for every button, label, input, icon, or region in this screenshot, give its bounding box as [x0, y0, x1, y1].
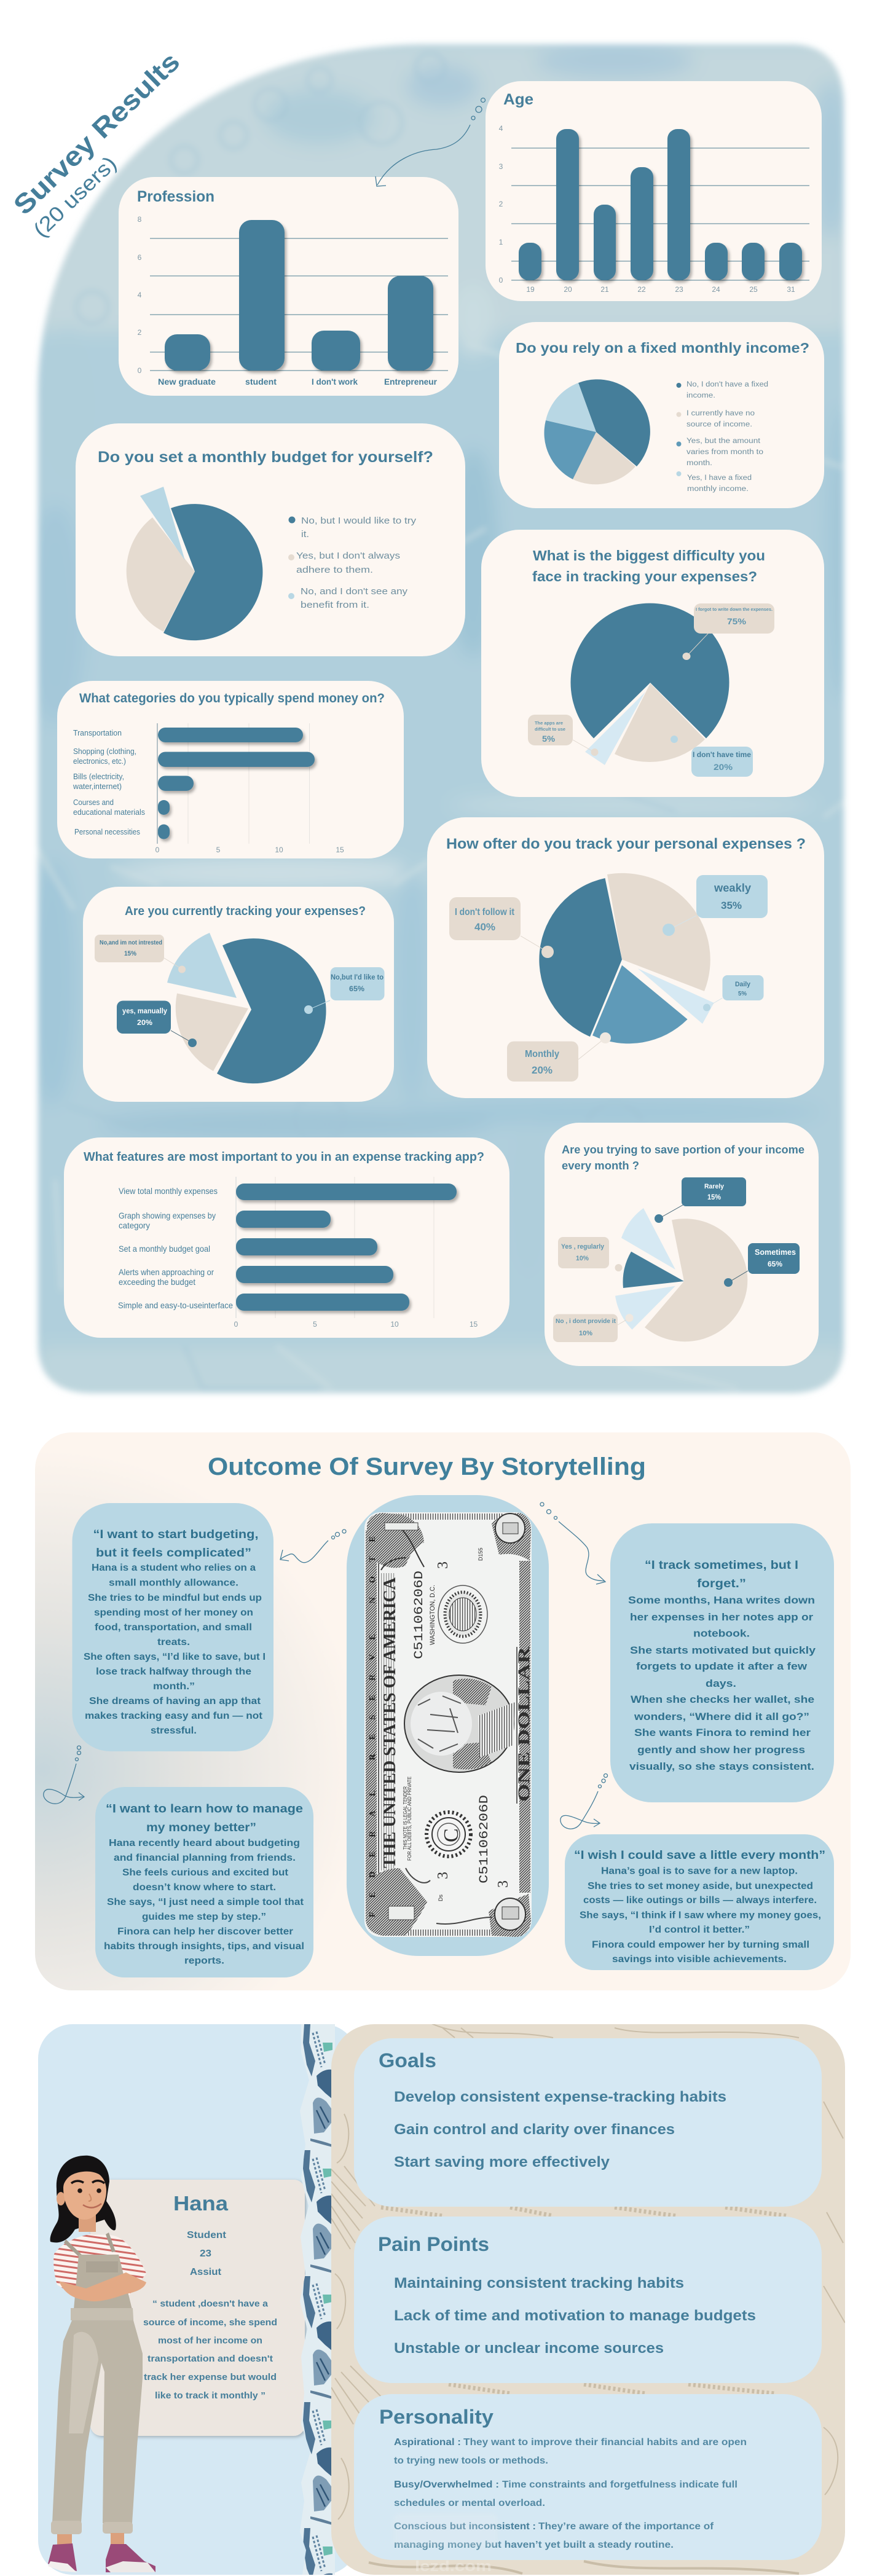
chart: age bars: 25 [749, 285, 758, 294]
callout: rarely [655, 1177, 746, 1223]
chart: profession bars: 2 [138, 328, 142, 337]
quote: track sometimes: days. [706, 1678, 736, 1689]
chart: spending categories bars: Courses and [73, 798, 114, 807]
chart: spending categories bars: Transportation [73, 728, 122, 737]
quote: track sometimes: When she checks her wallet, she [631, 1694, 814, 1705]
quote: save every month: costs — like outings or bills — always interfere. [583, 1895, 817, 1906]
heading: fixed income: Do you rely on a fixed monthly income? [516, 340, 809, 356]
illustration: one dollar banknote [364, 1512, 533, 1937]
quote: start budgeting [73, 1503, 273, 1751]
chart: important features bars: Simple and easy-to-useinterface [118, 1300, 233, 1310]
quote: start budgeting: She often says, “I’d like to save, but I [84, 1652, 266, 1662]
heading: important features: What features are most important to you in an expense tracking app? [84, 1150, 484, 1164]
chart: age bars: 23 [675, 285, 683, 294]
quote: track sometimes: forgets to update it after a few [636, 1660, 808, 1672]
panel: monthly budget [76, 423, 465, 656]
chart: profession bars: I don't work [312, 377, 358, 387]
arrow: banknote to first quote [280, 1530, 346, 1563]
chart: profession bars: 4 [138, 291, 142, 299]
quote: track sometimes: wonders, “Where did it all go?” [634, 1711, 809, 1722]
pie chart: monthly budget [127, 487, 262, 640]
quote: track sometimes: Some months, Hana writes down [628, 1594, 815, 1606]
card: hana profile: Hana [173, 2192, 229, 2215]
chart: age bars: 21 [600, 285, 609, 294]
banknote inscriptions: ONE DOLLAR [515, 1647, 533, 1802]
callout: monthly [507, 1032, 611, 1082]
banknote inscriptions: FOR ALL DEBTS, PUBLIC AND PRIVATE [407, 1777, 412, 1861]
watermark: lezd.com [415, 2558, 492, 2575]
panel: biggest difficulty [481, 530, 824, 797]
quote: track sometimes: She wants Finora to remind her [634, 1727, 811, 1738]
quote: start budgeting: but it feels complicated” [96, 1547, 251, 1560]
callout: forgot to write: I forgot to write down the expenses. [696, 607, 773, 612]
chart: age bars: 0 [499, 276, 503, 285]
quote: track sometimes: her expenses in her notes app or [630, 1611, 813, 1623]
chart: spending categories bars [73, 723, 344, 854]
card: hana profile [90, 2180, 305, 2436]
chart: age bars: 3 [499, 162, 503, 171]
legend: monthly budget: it. [301, 530, 309, 540]
card: goals [354, 2038, 822, 2207]
callout: forgot to write [682, 603, 774, 660]
quote: start budgeting: She tries to be mindful but ends up [88, 1593, 262, 1603]
card: hana profile: Assiut [190, 2267, 221, 2277]
quote: track sometimes: forget.” [697, 1577, 746, 1590]
banknote inscriptions: FEDERAL RESERVE NOTE [368, 1536, 377, 1917]
pie chart: fixed income [544, 379, 650, 484]
quote: save every month: I’d control it better.” [649, 1925, 750, 1935]
quote: track sometimes: “I track sometimes, but I [645, 1559, 798, 1572]
callout: apps difficult: difficult to use [535, 726, 565, 732]
heading: tracking expenses: Are you currently tracking your expenses? [125, 905, 366, 918]
quote: save every month: Hana’s goal is to save for a new laptop. [601, 1866, 798, 1877]
card: pain points: Maintaining consistent tracking habits [394, 2275, 684, 2291]
panel: tracking frequency [427, 817, 824, 1098]
quote: start budgeting: “I want to start budgeting, [93, 1528, 258, 1541]
subtitle: twenty users: (20 users) [29, 152, 121, 242]
card: personality: Aspirational : [394, 2437, 461, 2448]
panel: banknote frame [347, 1495, 549, 1956]
callout: no time: I don't have time [693, 750, 751, 759]
callout: rarely: Rarely [704, 1183, 725, 1190]
chart: profession bars: Entrepreneur [384, 377, 438, 387]
card: pain points: Pain Points [378, 2233, 489, 2255]
legend: monthly budget: benefit from it. [301, 600, 369, 610]
pie chart: tracking expenses [167, 933, 326, 1083]
card: hana profile: most of her income on [158, 2335, 262, 2346]
quote: learn to manage money: Hana recently heard about budgeting [109, 1838, 300, 1848]
callout: weekly [663, 875, 768, 936]
banknote inscriptions: C [440, 1828, 463, 1842]
quote: start budgeting: food, transportation, and small [95, 1622, 252, 1633]
panel: persona left [38, 2024, 358, 2575]
quote: track sometimes [610, 1523, 834, 1802]
heading: monthly budget: Do you set a monthly budget for yourself? [98, 449, 433, 466]
arrow: to lower right quote [560, 1773, 607, 1829]
chart: age bars: 1 [499, 238, 503, 246]
callout: sometimes: 65% [768, 1260, 782, 1268]
quote: learn to manage money: “I want to learn how to manage [106, 1803, 303, 1815]
panel: age [486, 81, 822, 301]
legend: fixed income: month. [686, 460, 712, 467]
chart: important features bars [118, 1177, 478, 1329]
callout: apps difficult: The apps are [535, 720, 563, 726]
chart: age bars: 19 [526, 285, 535, 294]
callout: do not provide [553, 1314, 633, 1342]
banknote inscriptions: Ds [438, 1895, 444, 1901]
chart: important features bars: Set a monthly budget goal [119, 1244, 210, 1254]
panel: tracking expenses [83, 887, 394, 1102]
chart: profession bars: 8 [138, 215, 142, 224]
callout: would like to: 65% [349, 984, 364, 993]
chart: important features bars: 0 [234, 1320, 238, 1329]
quote: save every month: “I wish I could save a little every month” [574, 1849, 825, 1862]
heading: spending categories: What categories do you typically spend money on? [79, 691, 385, 705]
legend: fixed income: income. [686, 392, 715, 399]
callout: rarely: 15% [707, 1194, 721, 1201]
chart: important features bars: Alerts when approaching or [119, 1267, 214, 1277]
quote: track sometimes: She starts motivated but quickly [630, 1644, 816, 1656]
chart: profession bars: 0 [138, 366, 142, 375]
callout: daily [703, 975, 763, 1011]
card: pain points [354, 2217, 822, 2383]
legend: monthly budget [288, 516, 417, 610]
chart: age bars: 22 [637, 285, 646, 294]
quote: learn to manage money: my money better” [146, 1821, 256, 1834]
card: hana profile: like to track it monthly ” [155, 2390, 266, 2401]
quote: learn to manage money: Finora can help her discover better [117, 1926, 293, 1937]
banknote inscriptions: THIS NOTE IS LEGAL TENDER [403, 1786, 408, 1850]
decoration: crumpled dollar strip [300, 2024, 335, 2575]
legend: fixed income [676, 381, 768, 493]
banknote inscriptions [368, 1536, 533, 1917]
quote: track sometimes: visually, so she stays consistent. [629, 1761, 814, 1772]
card: personality: Busy/Overwhelmed : [394, 2480, 499, 2490]
quote: start budgeting: treats. [157, 1637, 190, 1647]
chart: age bars: 4 [499, 124, 503, 133]
card: pain points: Lack of time and motivation to manage budgets [394, 2307, 756, 2324]
quote: start budgeting: She dreams of having an app that [89, 1696, 261, 1706]
heading: profession: Profession [137, 188, 214, 205]
chart: spending categories bars: educational materials [73, 807, 145, 817]
panel: spending categories [57, 681, 404, 858]
heading: saving portion: every month ? [562, 1160, 639, 1172]
card: personality: Time constraints and forgetfulness indicate full [502, 2480, 738, 2490]
card: pain points: Unstable or unclear income sources [394, 2340, 664, 2357]
callout: would like to [304, 967, 385, 1014]
quote: learn to manage money: and financial planning from friends. [114, 1853, 296, 1863]
callout: do not follow: I don't follow it [455, 907, 515, 917]
quote: start budgeting: small monthly allowance. [109, 1578, 238, 1588]
chart: spending categories bars: 15 [336, 846, 344, 854]
callout: not interested: 15% [124, 950, 136, 957]
heading: saving portion: Are you trying to save portion of your income [562, 1144, 804, 1156]
heading: biggest difficulty: face in tracking your expenses? [532, 568, 757, 584]
callout: would like to: No,but I'd like to [331, 974, 384, 981]
chart: spending categories bars: 0 [155, 846, 160, 854]
legend: fixed income: No, I don't have a fixed [686, 381, 768, 388]
quote: learn to manage money: She feels curious and excited but [122, 1867, 288, 1878]
panel: storytelling [35, 1432, 851, 1990]
card: hana profile: 23 [200, 2248, 211, 2259]
callout: daily: 5% [738, 991, 747, 997]
heading: age: Age [503, 91, 533, 108]
quote: start budgeting: lose track halfway through the [96, 1667, 251, 1677]
banknote inscriptions: D155 [478, 1547, 484, 1561]
card: goals: Develop consistent expense-tracking habits [394, 2089, 726, 2105]
panel: saving portion [545, 1123, 819, 1366]
quote: learn to manage money: She says, “I just need a simple tool that [107, 1897, 304, 1907]
card: personality: to trying new tools or methods. [394, 2456, 548, 2466]
card: personality: managing money but haven’t yet built a steady routine. [394, 2540, 674, 2550]
card: hana profile: track her expense but would [144, 2372, 277, 2382]
callout: do not follow: 40% [474, 921, 495, 933]
panel: survey results background [25, 31, 860, 1407]
chart: important features bars: 5 [313, 1320, 317, 1329]
banknote inscriptions: 3 [435, 1561, 451, 1569]
quote: learn to manage money: habits through insights, tips, and visual [104, 1941, 304, 1952]
quote: learn to manage money: guides me step by step.” [142, 1912, 266, 1922]
card: hana profile: “ student ,doesn't have a [152, 2298, 269, 2309]
quote: learn to manage money: doesn’t know where to start. [133, 1882, 276, 1893]
chart: spending categories bars: Shopping (clothing, [73, 747, 136, 756]
chart: important features bars: 15 [470, 1320, 478, 1329]
banknote inscriptions: 3 [435, 1872, 451, 1879]
banknote inscriptions: WASHINGTON, D.C. [429, 1585, 436, 1645]
legend: fixed income: Yes, but the amount [686, 438, 761, 445]
pie chart: biggest difficulty [570, 603, 729, 765]
quote: learn to manage money [95, 1787, 313, 1977]
chart: important features bars: 10 [390, 1320, 399, 1329]
panel: persona right [331, 2023, 845, 2575]
legend: fixed income: varies from month to [686, 449, 763, 456]
banknote inscriptions: C51106206D [412, 1571, 427, 1659]
callout: regularly: Yes , regularly [561, 1243, 605, 1251]
quote: track sometimes: gently and show her progress [637, 1744, 805, 1756]
legend: fixed income: monthly income. [687, 485, 749, 493]
chart: profession bars: student [245, 377, 277, 387]
card: hana profile: Student [187, 2230, 226, 2240]
card: personality: Personality [379, 2406, 494, 2428]
legend: fixed income: source of income. [686, 421, 752, 428]
pie chart: tracking frequency [539, 873, 714, 1043]
heading: biggest difficulty: What is the biggest difficulty you [533, 548, 765, 564]
quote: start budgeting: makes tracking easy and fun — not [85, 1711, 262, 1721]
legend: fixed income: I currently have no [686, 410, 755, 417]
chart: age bars [499, 124, 809, 294]
chart: age bars: 31 [787, 285, 795, 294]
watermark [393, 2513, 498, 2575]
callout: weekly: 35% [721, 900, 742, 911]
callout: monthly: Monthly [525, 1049, 559, 1059]
quote: start budgeting: Hana is a student who relies on a [92, 1563, 256, 1573]
quote: start budgeting: stressful. [151, 1726, 197, 1736]
callout: apps difficult [528, 715, 599, 756]
callout: yes manually [117, 1000, 197, 1047]
panel: important features [64, 1137, 509, 1338]
quote: save every month: She tries to set money aside, but unexpected [588, 1881, 813, 1891]
legend: fixed income: Yes, I have a fixed [687, 474, 752, 482]
card: goals: Goals [379, 2049, 436, 2071]
quote: start budgeting: month.” [153, 1681, 195, 1692]
chart: spending categories bars: electronics, etc.) [73, 756, 126, 766]
card: goals: Gain control and clarity over finances [394, 2121, 675, 2138]
callout: not interested: No,and im not intrested [100, 940, 162, 946]
chart: important features bars: View total monthly expenses [119, 1186, 218, 1196]
chart: age bars: 20 [564, 285, 572, 294]
callout: yes manually: yes, manually [122, 1007, 167, 1015]
quote: save every month [565, 1834, 834, 1970]
card: personality: They want to improve their financial habits and are open [463, 2437, 747, 2448]
chart: important features bars: Graph showing expenses by [119, 1211, 216, 1220]
card: personality: Conscious but inconsistent : [394, 2521, 536, 2532]
title: survey results: Survey Results [8, 47, 186, 221]
quote: save every month: Finora could empower her by turning small [592, 1939, 809, 1950]
chart: profession bars: 6 [138, 253, 142, 262]
callout: do not follow [449, 897, 554, 958]
pie chart: saving portion [615, 1208, 747, 1341]
callout: daily: Daily [735, 981, 751, 988]
card: hana profile: transportation and doesn't [148, 2354, 273, 2364]
callout: forgot to write: 75% [727, 616, 747, 626]
callout: yes manually: 20% [137, 1018, 152, 1027]
panel: fixed monthly income [499, 322, 824, 508]
illustration: hana character [48, 2156, 155, 2572]
callout: sometimes [724, 1243, 800, 1287]
legend: monthly budget: Yes, but I don't always [296, 551, 400, 561]
chart: spending categories bars: 5 [216, 846, 221, 854]
quote: save every month: savings into visible achievements. [612, 1954, 787, 1965]
legend: monthly budget: No, but I would like to try [301, 516, 417, 526]
banknote inscriptions: C51106206D [478, 1795, 492, 1883]
banknote inscriptions: THE UNITED STATES OF AMERICA [380, 1577, 399, 1868]
heading: tracking frequency: How ofter do you track your personal expenses ? [446, 836, 806, 852]
heading: outcome of survey: Outcome Of Survey By Storytelling [208, 1453, 646, 1480]
callout: weekly: weakly [714, 882, 751, 894]
chart: spending categories bars: Bills (electricity, [73, 772, 124, 781]
callout: no time [671, 736, 753, 777]
card: hana profile: source of income, she spend [143, 2317, 277, 2328]
arrow: banknote to second quote [540, 1502, 605, 1584]
arrow: to lower left quote [44, 1746, 84, 1804]
banknote inscriptions: 3 [495, 1880, 511, 1888]
chart: profession bars: New graduate [158, 377, 216, 387]
card: goals: Start saving more effectively [394, 2154, 610, 2170]
arrow: age to profession [376, 98, 486, 186]
chart: important features bars: exceeding the budget [119, 1277, 195, 1287]
callout: sometimes: Sometimes [755, 1248, 796, 1257]
callout: regularly [558, 1237, 622, 1271]
callout: do not provide: No , i dont provide it [556, 1317, 616, 1325]
chart: important features bars: category [119, 1220, 150, 1230]
quote: save every month: She says, “I think if I saw where my money goes, [580, 1910, 821, 1921]
legend: monthly budget: No, and I don't see any [301, 587, 408, 597]
quote: learn to manage money: reports. [184, 1955, 224, 1966]
card: personality [354, 2394, 822, 2560]
chart: age bars: 2 [499, 200, 503, 208]
quote: start budgeting: spending most of her money on [94, 1608, 253, 1618]
card: personality: They’re aware of the importance of [538, 2521, 714, 2532]
legend: monthly budget: adhere to them. [296, 565, 373, 575]
chart: spending categories bars: Personal necessities [74, 827, 140, 836]
panel: profession [119, 177, 458, 396]
callout: monthly: 20% [532, 1064, 553, 1076]
heading: saving portion [562, 1144, 804, 1172]
callout: do not provide: 10% [579, 1330, 592, 1337]
chart: spending categories bars: water,internet) [73, 782, 122, 791]
heading: biggest difficulty [532, 548, 765, 584]
chart: profession bars [138, 215, 448, 387]
card: personality: schedules or mental overload. [394, 2498, 545, 2508]
quote: track sometimes: notebook. [693, 1627, 750, 1639]
chart: spending categories bars: 10 [275, 846, 283, 854]
callout: not interested [95, 935, 186, 973]
chart: age bars: 24 [712, 285, 720, 294]
callout: regularly: 10% [576, 1255, 589, 1262]
callout: no time: 20% [714, 762, 733, 772]
callout: apps difficult: 5% [542, 734, 556, 744]
